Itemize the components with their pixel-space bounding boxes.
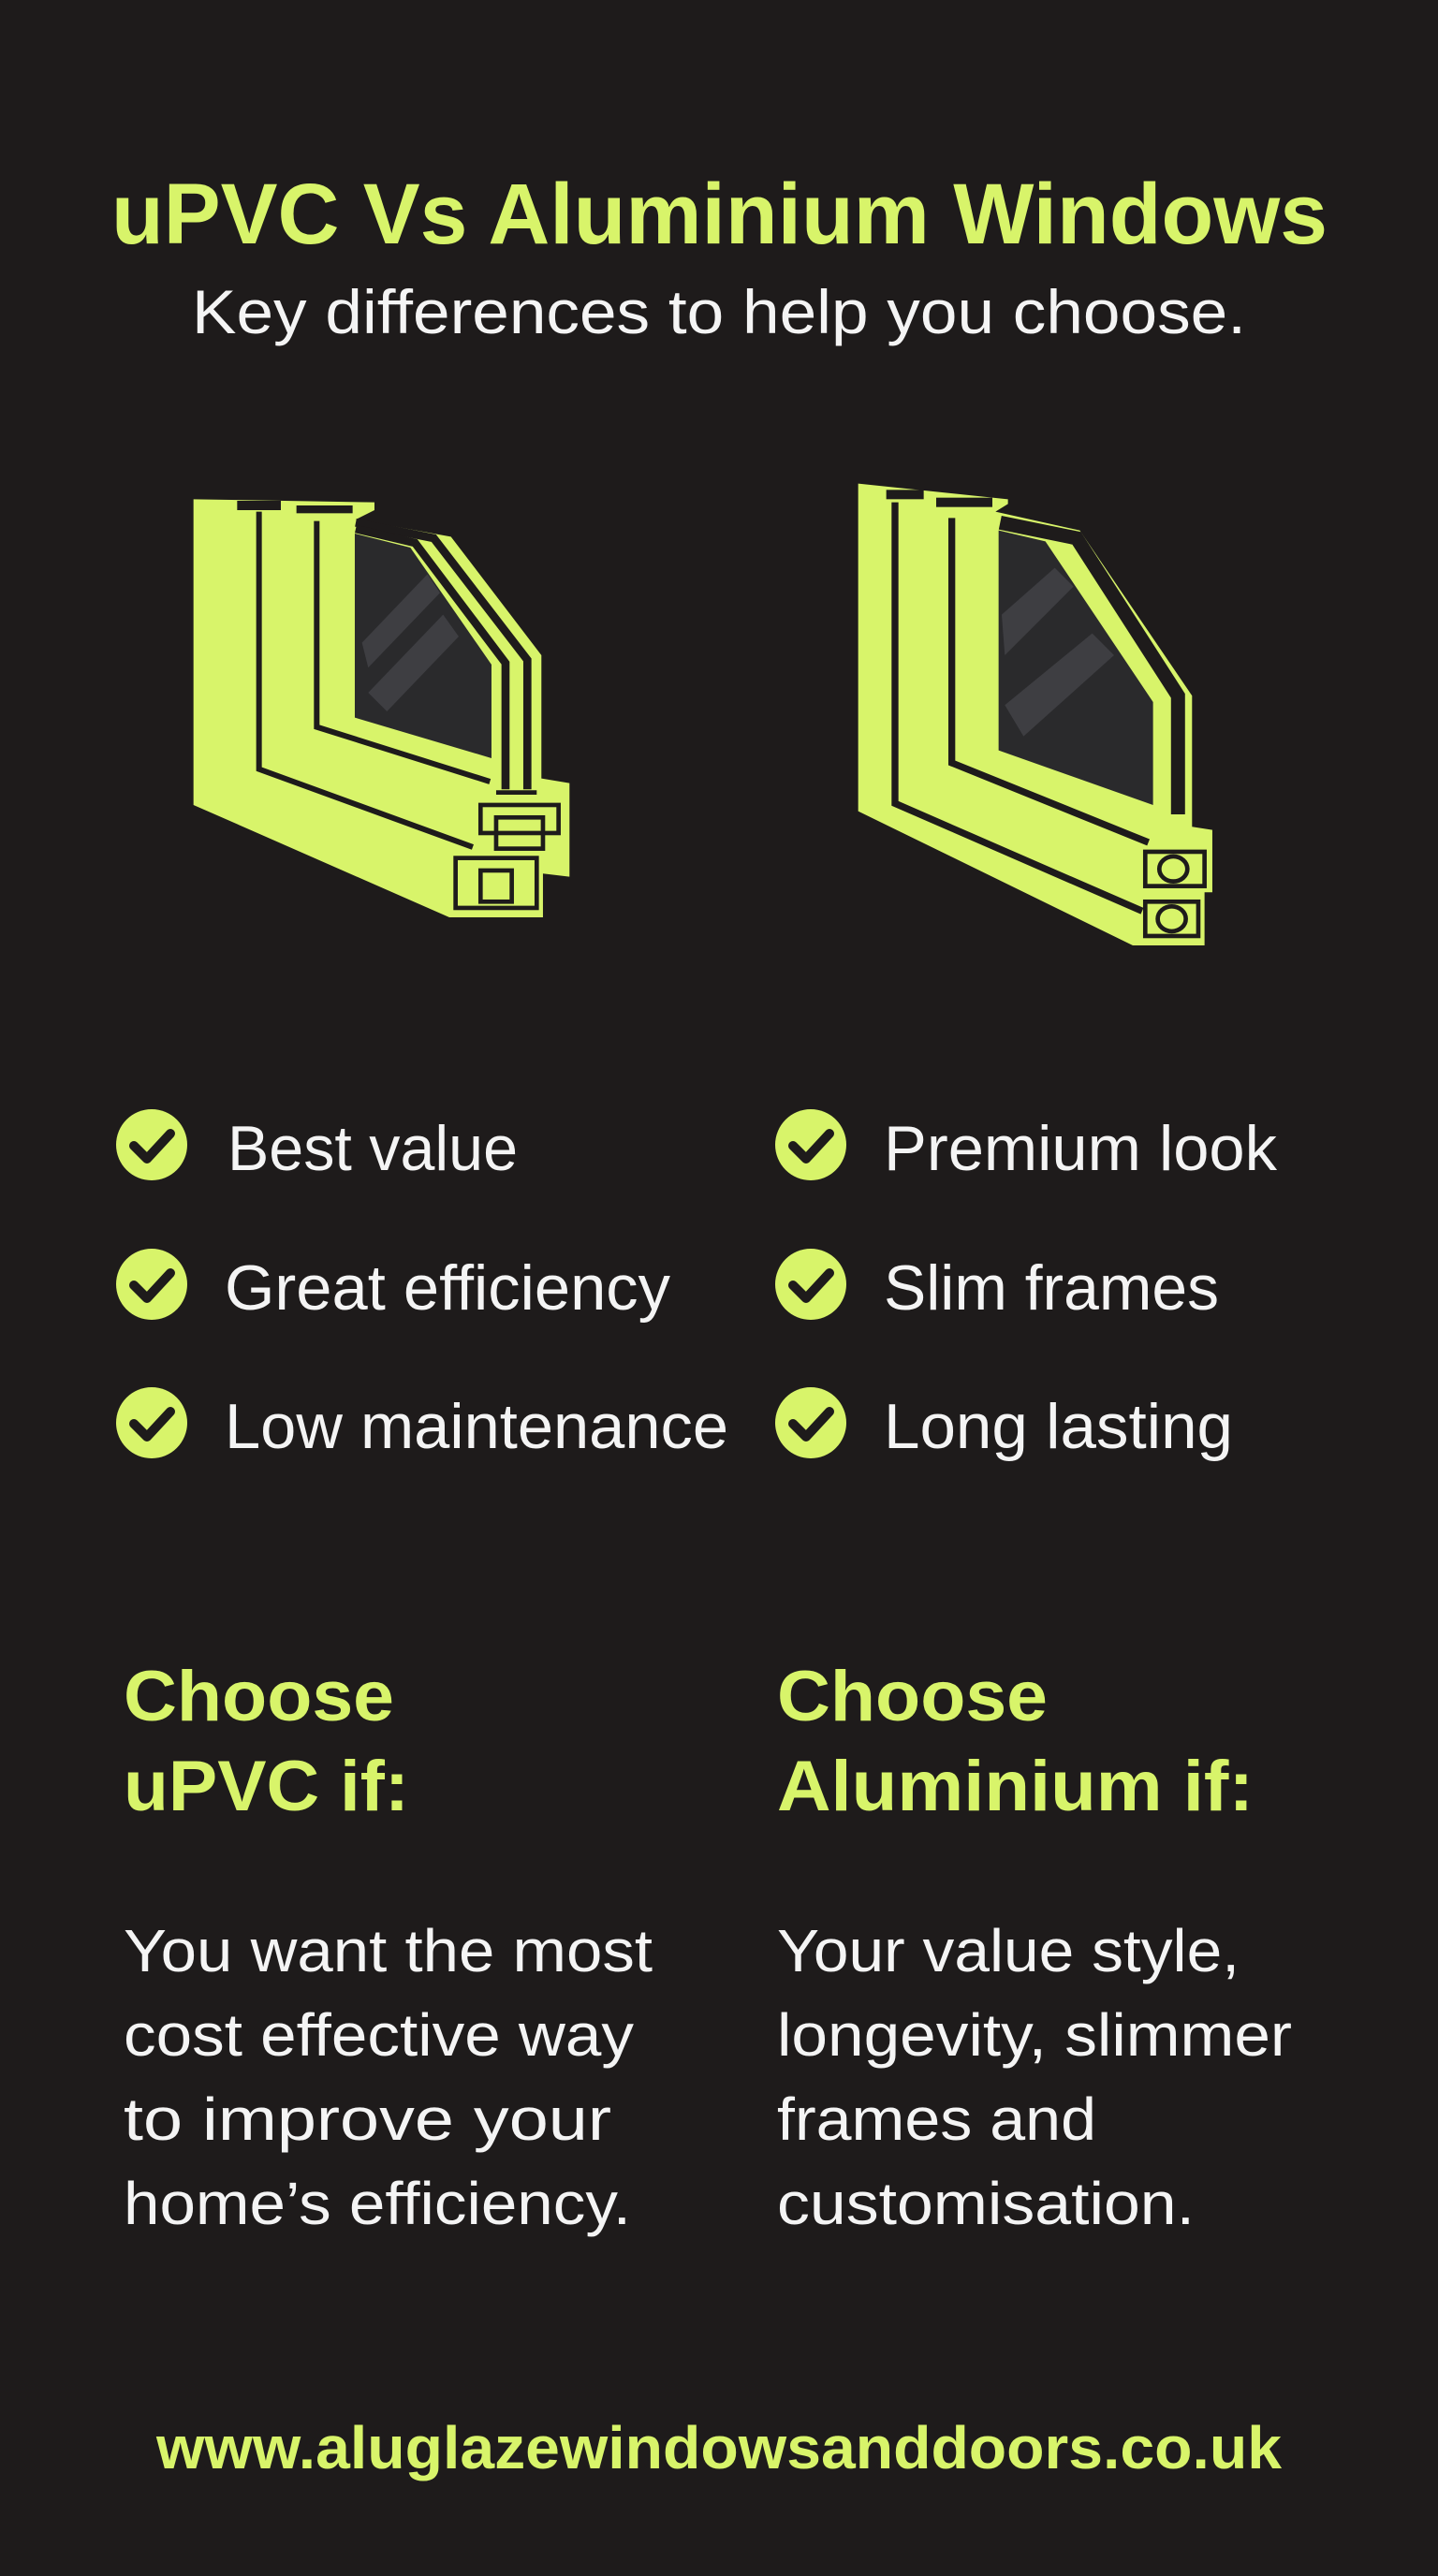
heading: Choose uPVC if: uPVC if: — [124, 1747, 409, 1826]
subtitle: Key differences to help you choose. — [192, 277, 1246, 346]
checklist: aluminium benefits — [775, 1109, 1278, 1462]
check item: Best value: Best value — [227, 1113, 518, 1184]
heading: Choose uPVC if: Choose — [124, 1657, 394, 1736]
check item: Best value — [116, 1109, 518, 1184]
check item: Low maintenance: Low maintenance — [225, 1391, 728, 1462]
title: uPVC Vs Aluminium Windows — [111, 167, 1328, 262]
text block: uPVC recommendation: to improve your — [124, 2086, 611, 2153]
heading: Choose Aluminium if: Aluminium if: — [777, 1747, 1254, 1826]
icon: aluminium window profile — [858, 484, 1212, 945]
text block: aluminium recommendation: longevity, slimmer — [777, 2001, 1292, 2069]
heading: Choose Aluminium if — [777, 1657, 1254, 1826]
heading: Choose uPVC if — [124, 1657, 409, 1826]
checklist: uPVC benefits — [116, 1109, 728, 1462]
text block: uPVC recommendation — [124, 1917, 653, 2237]
heading: Choose Aluminium if: Choose — [777, 1657, 1048, 1736]
check item: Premium look: Premium look — [884, 1113, 1278, 1184]
check item: Long lasting: Long lasting — [884, 1391, 1233, 1462]
check item: Slim frames: Slim frames — [884, 1252, 1219, 1324]
text block: aluminium recommendation: Your value style, — [777, 1917, 1240, 1984]
text block: uPVC recommendation: home’s efficiency. — [124, 2170, 631, 2237]
icon: uPVC window profile — [194, 499, 569, 917]
check item: Great efficiency: Great efficiency — [225, 1252, 670, 1324]
text block: uPVC recommendation: cost effective way — [124, 2001, 634, 2069]
text block: uPVC recommendation: You want the most — [124, 1917, 653, 1984]
text block: aluminium recommendation: frames and — [777, 2086, 1096, 2153]
text block: aluminium recommendation: customisation. — [777, 2170, 1195, 2237]
footer: website URL: www.aluglazewindowsanddoors.co.uk — [155, 2414, 1282, 2481]
text block: aluminium recommendation — [777, 1917, 1292, 2237]
